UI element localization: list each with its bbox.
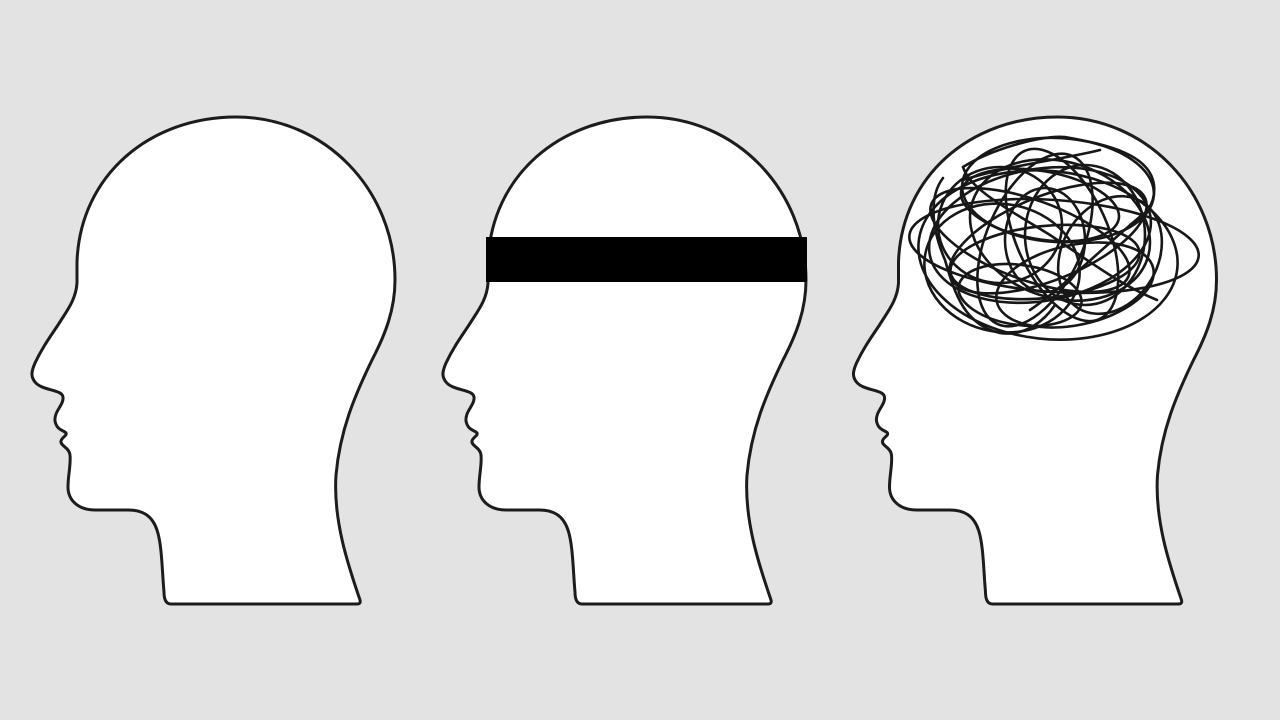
- head 3: profile with tangled scribble: [853, 117, 1216, 604]
- tangled scribble: [906, 132, 1202, 352]
- head 2: profile with black band: [443, 117, 807, 604]
- black band across the head: [486, 237, 807, 282]
- head 1: blank profile: [32, 117, 395, 604]
